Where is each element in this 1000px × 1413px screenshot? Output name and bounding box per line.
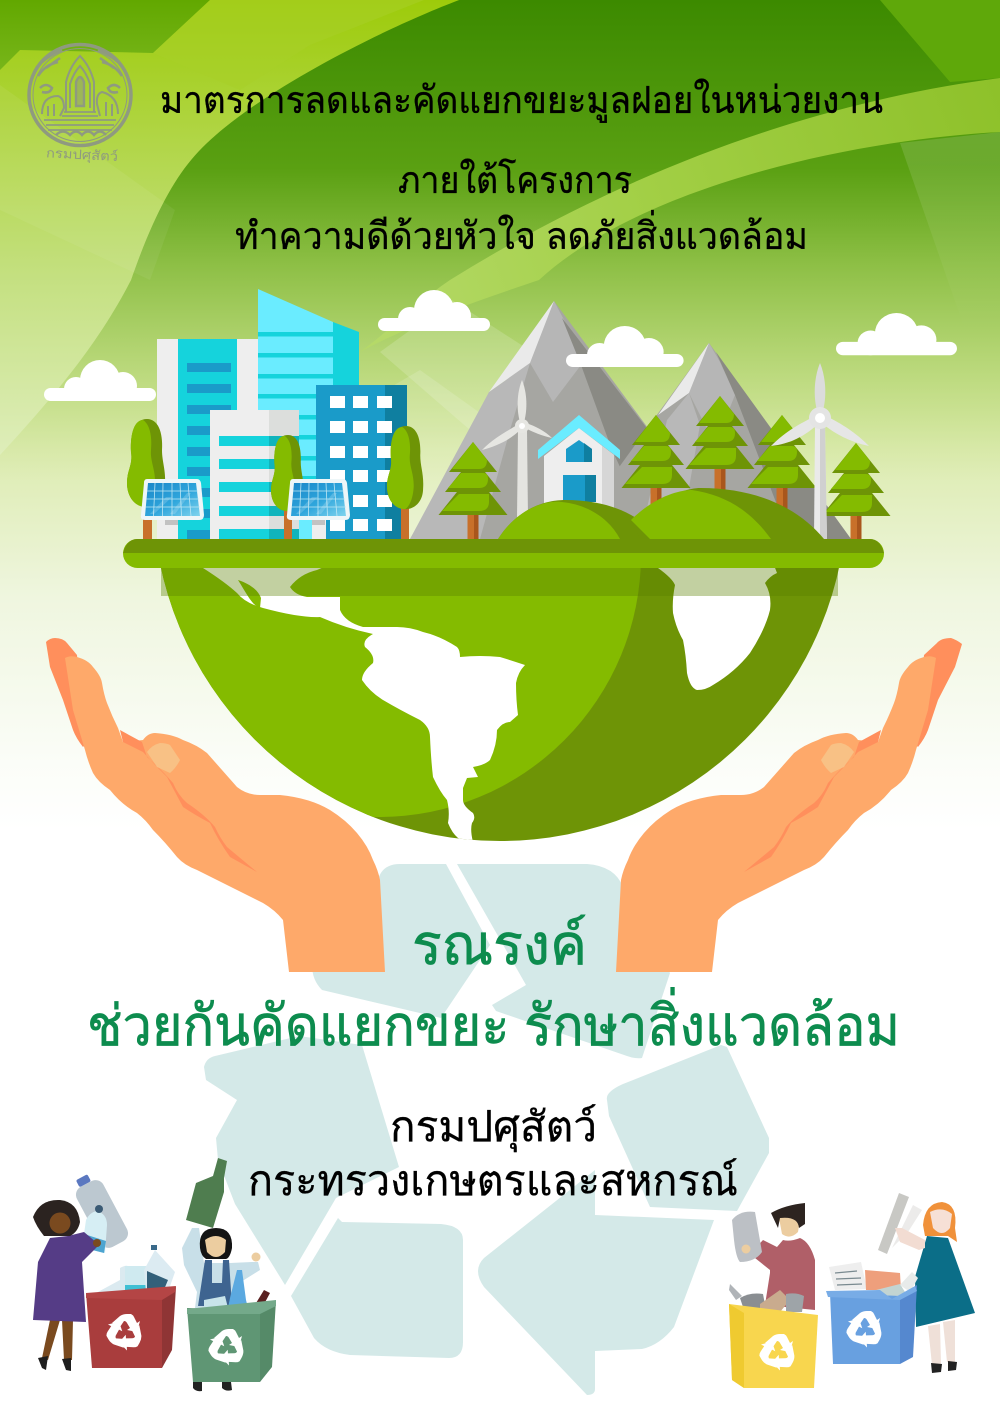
title: header text: มาตรการลดและคัดแยกขยะมูลฝอยในหน่วยงาน <box>160 79 883 123</box>
shoes <box>193 1382 232 1391</box>
dress <box>33 1232 99 1322</box>
legs <box>928 1320 955 1365</box>
building: blue block <box>299 385 407 539</box>
clouds <box>44 290 957 401</box>
dress <box>915 1236 975 1327</box>
trees and solar panels <box>127 419 423 539</box>
panel: mountains <box>410 301 890 540</box>
plastic waste <box>96 1245 175 1293</box>
icon: department seal <box>29 44 131 146</box>
hand <box>742 1244 750 1254</box>
title: header text <box>160 79 883 258</box>
person: man with can and yellow bin <box>729 1203 818 1388</box>
title: header text: ภายใต้โครงการ <box>398 158 632 202</box>
shoes <box>38 1356 71 1371</box>
yellow bin <box>729 1304 818 1388</box>
person: woman in teal with paper and blue bin <box>826 1193 975 1373</box>
building: white and teal tower <box>157 339 258 539</box>
recycling symbol watermark <box>204 864 769 1395</box>
house <box>538 415 620 510</box>
paper waste <box>829 1262 918 1299</box>
heading: campaign: ช่วยกันคัดแยกขยะ รักษาสิ่งแวดล้อม <box>87 987 900 1057</box>
waste glass <box>204 1270 270 1308</box>
text block: organisation <box>248 1103 738 1204</box>
face <box>50 1212 70 1234</box>
red bin <box>86 1286 176 1368</box>
hand <box>93 1239 101 1247</box>
island <box>238 580 261 608</box>
seal caption: กรมปศุสัตว์ <box>46 145 118 165</box>
panel: city buildings <box>127 289 423 539</box>
panel: globe <box>123 539 884 841</box>
face <box>779 1214 800 1237</box>
continent: africa <box>658 568 777 690</box>
hair <box>33 1200 80 1236</box>
hand <box>252 1252 260 1262</box>
paper rolls <box>878 1193 922 1254</box>
hair <box>923 1202 957 1242</box>
green bin <box>187 1300 276 1382</box>
body <box>750 1238 815 1310</box>
heading: campaign <box>87 913 900 1057</box>
shadow band <box>161 568 838 596</box>
heading: campaign: รณรงค์ <box>412 913 587 976</box>
big mountain <box>410 301 730 539</box>
aluminium can <box>732 1212 762 1262</box>
text block: organisation: กรมปศุสัตว์ <box>390 1103 597 1153</box>
second mountain <box>567 343 851 539</box>
green hills <box>498 488 824 539</box>
building: low white block <box>210 410 299 539</box>
face <box>205 1236 226 1257</box>
glass bottle <box>186 1158 227 1228</box>
shirt <box>182 1228 260 1308</box>
right hand <box>616 638 962 972</box>
wind turbine right <box>771 363 869 539</box>
left hand <box>46 638 385 972</box>
plastic bottles <box>73 1174 131 1253</box>
person: woman with glass bottle and green bin <box>182 1158 276 1391</box>
hair <box>200 1228 232 1259</box>
arms <box>895 1228 925 1250</box>
wind turbine left <box>482 380 552 518</box>
legs <box>42 1320 73 1360</box>
hair <box>771 1203 805 1228</box>
platform <box>123 539 884 568</box>
face <box>930 1209 952 1233</box>
title: header text: ทำความดีด้วยหัวใจ ลดภัยสิ่งแวดล้อม <box>235 210 808 258</box>
shoes <box>931 1361 957 1373</box>
blue bin <box>826 1285 917 1364</box>
metal waste <box>729 1284 804 1312</box>
globe body <box>161 568 839 841</box>
continent: americas <box>193 560 525 842</box>
text block: organisation: กระทรวงเกษตรและสหกรณ์ <box>248 1157 738 1204</box>
person: woman in purple with red bin <box>33 1174 176 1371</box>
apron <box>198 1260 232 1306</box>
pine trees <box>438 396 890 540</box>
building: tall glass tower <box>258 289 359 539</box>
